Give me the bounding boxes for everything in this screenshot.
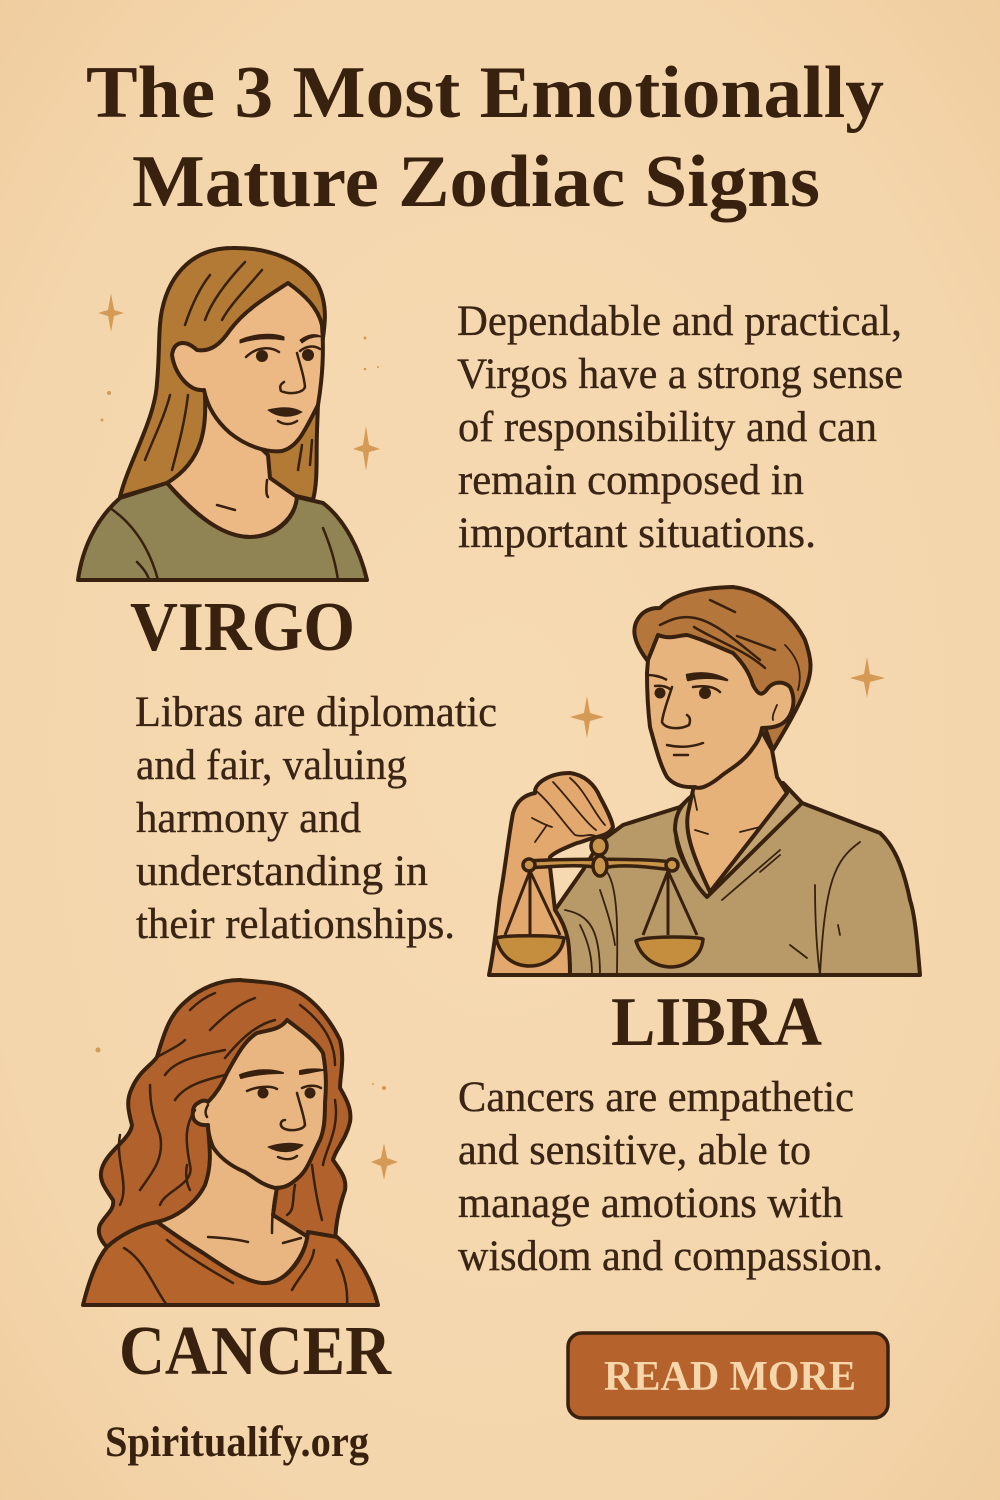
title xyxy=(86,52,884,223)
shirt: Virgo xyxy=(78,483,367,580)
sparkles: Libra xyxy=(570,657,885,738)
text: Libra description: their relationships. xyxy=(136,901,455,948)
shirt: Cancer xyxy=(83,1222,378,1305)
sparkle: Cancer xyxy=(96,1048,398,1180)
text: Libra description: understanding in xyxy=(136,848,428,895)
heading: Libra: LIBRA xyxy=(611,984,822,1061)
text: Cancer description: wisdom and compassion. xyxy=(458,1233,883,1280)
button: read more: READ MORE xyxy=(604,1354,856,1400)
text: Libra description: and fair, valuing xyxy=(136,742,407,789)
text: Virgo description: Dependable and practical, xyxy=(457,298,902,345)
scales: Libra xyxy=(496,837,703,967)
text: Cancer description: manage amotions with xyxy=(458,1180,843,1227)
illustration: Virgo woman xyxy=(78,248,367,580)
arm and hand: Libra xyxy=(489,773,613,975)
text: Cancer description: Cancers are empathetic xyxy=(458,1074,854,1121)
text: Cancer description xyxy=(458,1074,883,1280)
shirt: Libra xyxy=(555,783,920,975)
text: Virgo description: of responsibility and can xyxy=(458,404,877,451)
text: Libra description: harmony and xyxy=(136,795,361,842)
footer: site name: Spiritualify.org xyxy=(105,1419,369,1466)
text: Libra description xyxy=(135,689,497,948)
text: Virgo description xyxy=(457,298,903,557)
heading: Virgo: VIRGO xyxy=(130,589,355,666)
title: The 3 Most Emotionally xyxy=(86,52,884,134)
title: Mature Zodiac Signs xyxy=(132,141,820,223)
button: read more xyxy=(568,1333,888,1418)
heading: Cancer: CANCER xyxy=(119,1313,392,1390)
sparkles: Virgo xyxy=(98,293,380,471)
text: Virgo description: important situations. xyxy=(458,510,816,557)
text: Virgo description: Virgos have a strong sense xyxy=(457,351,903,398)
illustration: Cancer woman xyxy=(83,980,378,1305)
text: Cancer description: and sensitive, able to xyxy=(458,1127,811,1174)
text: Libra description: Libras are diplomatic xyxy=(135,689,497,736)
illustration: Libra man with scales xyxy=(489,587,920,975)
text: Virgo description: remain composed in xyxy=(458,457,804,504)
